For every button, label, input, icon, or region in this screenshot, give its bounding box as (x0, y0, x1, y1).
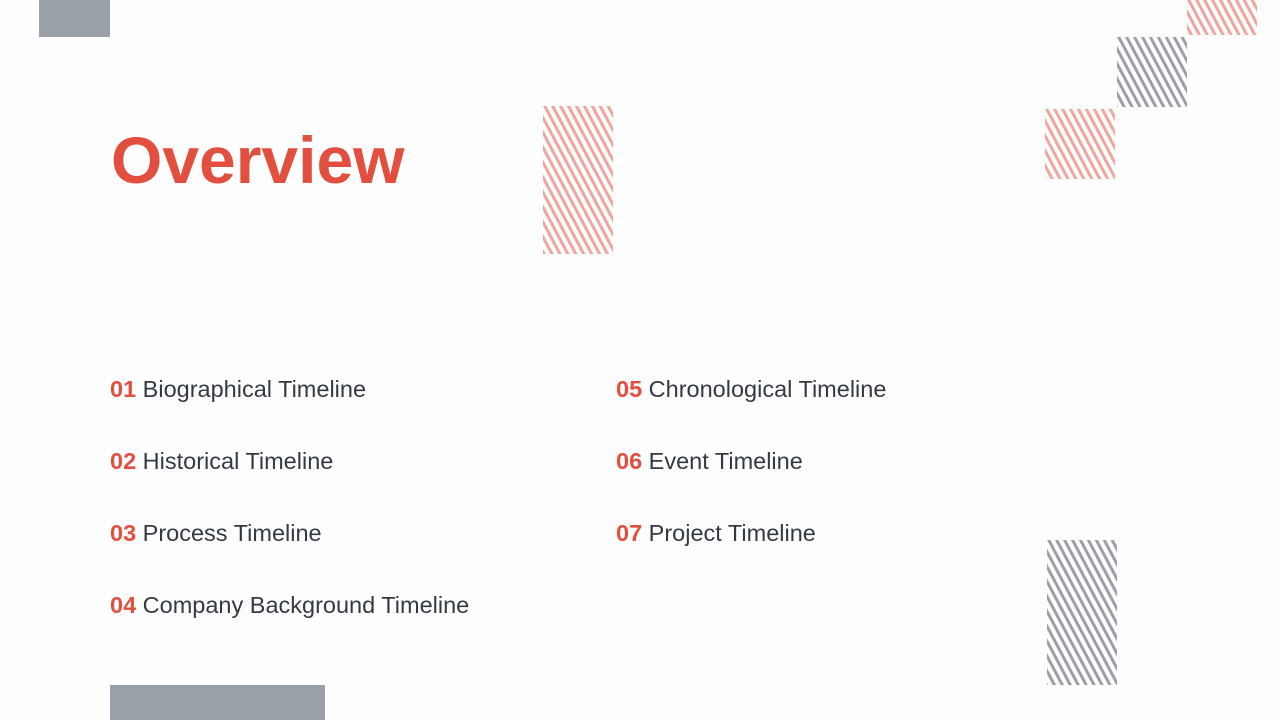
list: right column (616, 376, 886, 546)
title: Overview (111, 123, 405, 197)
striped block: bottom-right gray (1047, 540, 1117, 685)
item 02: 02 Historical Timeline (110, 448, 333, 474)
item 06: 06 Event Timeline (616, 448, 803, 474)
item 07: 07 Project Timeline (616, 520, 816, 546)
decorative block: bottom gray (110, 685, 325, 720)
striped block: center pink (543, 106, 613, 254)
item 03: 03 Process Timeline (110, 520, 322, 546)
decorative block: top-left gray (39, 0, 110, 37)
striped block: top-right gray (1117, 37, 1187, 107)
striped block: top-right pink (1187, 0, 1257, 35)
striped block: right pink (1045, 109, 1115, 179)
list: left column (110, 376, 469, 618)
item 01: 01 Biographical Timeline (110, 376, 366, 402)
item 04: 04 Company Background Timeline (110, 592, 469, 618)
item 05: 05 Chronological Timeline (616, 376, 886, 402)
